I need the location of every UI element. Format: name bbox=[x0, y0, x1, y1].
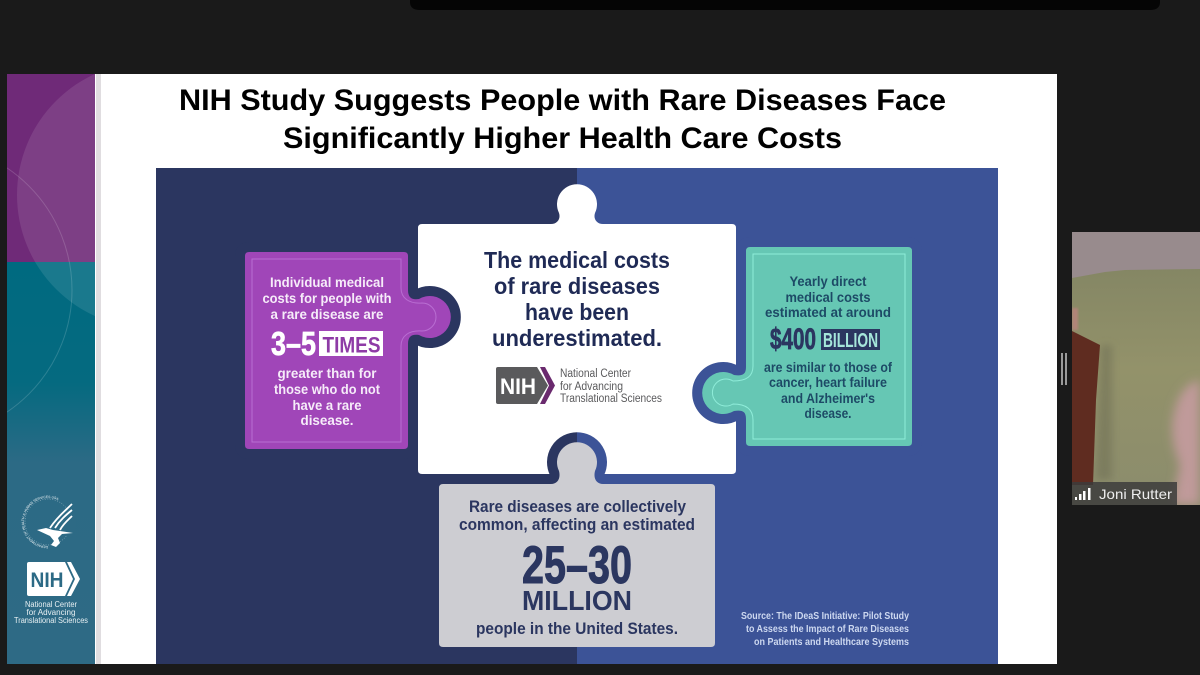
participant name label bbox=[1072, 482, 1177, 505]
NIH logo center: for Advancing bbox=[560, 381, 623, 393]
source note: to Assess the Impact of Rare Diseases bbox=[746, 624, 909, 635]
signal icon bbox=[1075, 488, 1090, 500]
purple text: have a rare bbox=[292, 398, 362, 413]
teal text: BILLION bbox=[823, 330, 878, 352]
NIH logo center bbox=[496, 367, 662, 405]
gray text: MILLION bbox=[522, 585, 632, 616]
teal text: and Alzheimer's bbox=[781, 391, 875, 406]
purple text: greater than for bbox=[278, 366, 377, 381]
NIH logo sidebar bbox=[14, 562, 88, 625]
center heading bbox=[484, 247, 670, 351]
NIH logo sidebar: National Center bbox=[25, 600, 77, 609]
slide bbox=[7, 74, 1057, 664]
gray text: people in the United States. bbox=[476, 619, 678, 638]
NIH logo center: NIH bbox=[500, 374, 536, 399]
title: Significantly Higher Health Care Costs bbox=[283, 122, 842, 155]
puzzle piece: purple bbox=[245, 252, 451, 449]
purple text: costs for people with bbox=[262, 291, 392, 306]
teal text bbox=[764, 274, 892, 421]
webcam video bbox=[1072, 232, 1200, 505]
teal text: disease. bbox=[804, 406, 852, 421]
source note: on Patients and Healthcare Systems bbox=[754, 637, 909, 648]
slide white background bbox=[95, 74, 1057, 664]
NIH logo center: Translational Sciences bbox=[560, 393, 662, 405]
NIH logo sidebar: Translational Sciences bbox=[14, 616, 88, 625]
purple text: those who do not bbox=[274, 382, 380, 397]
gray text bbox=[459, 497, 695, 638]
purple text: TIMES bbox=[322, 332, 380, 358]
gray text: Rare diseases are collectively bbox=[469, 497, 686, 516]
gray text: 25–30 bbox=[522, 536, 632, 595]
sidebar bbox=[7, 74, 101, 664]
puzzle piece: teal bbox=[702, 247, 912, 446]
source note: Source: The IDeaS Initiative: Pilot Study bbox=[741, 611, 909, 622]
center heading: underestimated. bbox=[492, 325, 662, 351]
HHS seal: DEPARTMENT OF HEALTH & HUMAN SERVICES USA bbox=[22, 496, 58, 548]
purple text: disease. bbox=[300, 413, 354, 428]
center heading: have been bbox=[525, 299, 629, 325]
purple text: Individual medical bbox=[270, 275, 384, 290]
purple text bbox=[262, 275, 392, 428]
teal text: Yearly direct bbox=[790, 274, 867, 289]
teal text: are similar to those of bbox=[764, 360, 892, 375]
title: NIH Study Suggests People with Rare Diseases Face bbox=[179, 84, 946, 117]
puzzle piece: gray bbox=[439, 442, 715, 647]
NIH logo center: National Center bbox=[560, 368, 631, 380]
teal text: medical costs bbox=[786, 290, 870, 305]
panel divider handle bbox=[1061, 353, 1067, 385]
teal text: estimated at around bbox=[765, 305, 891, 320]
purple text: 3–5 bbox=[271, 325, 316, 362]
purple text: a rare disease are bbox=[270, 307, 384, 322]
infographic panel bbox=[156, 168, 998, 664]
top toolbar bar bbox=[410, 0, 1160, 10]
teal text: cancer, heart failure bbox=[769, 375, 887, 390]
participant name label: Joni Rutter bbox=[1099, 486, 1172, 502]
center heading: The medical costs bbox=[484, 247, 670, 273]
source note bbox=[741, 611, 909, 648]
title bbox=[179, 84, 946, 155]
NIH logo sidebar: for Advancing bbox=[26, 608, 76, 617]
NIH logo sidebar: NIH bbox=[30, 569, 64, 592]
gray text: common, affecting an estimated bbox=[459, 515, 695, 534]
teal text: $400 bbox=[770, 323, 816, 356]
puzzle piece: center white bbox=[418, 184, 736, 474]
center heading: of rare diseases bbox=[494, 273, 660, 299]
